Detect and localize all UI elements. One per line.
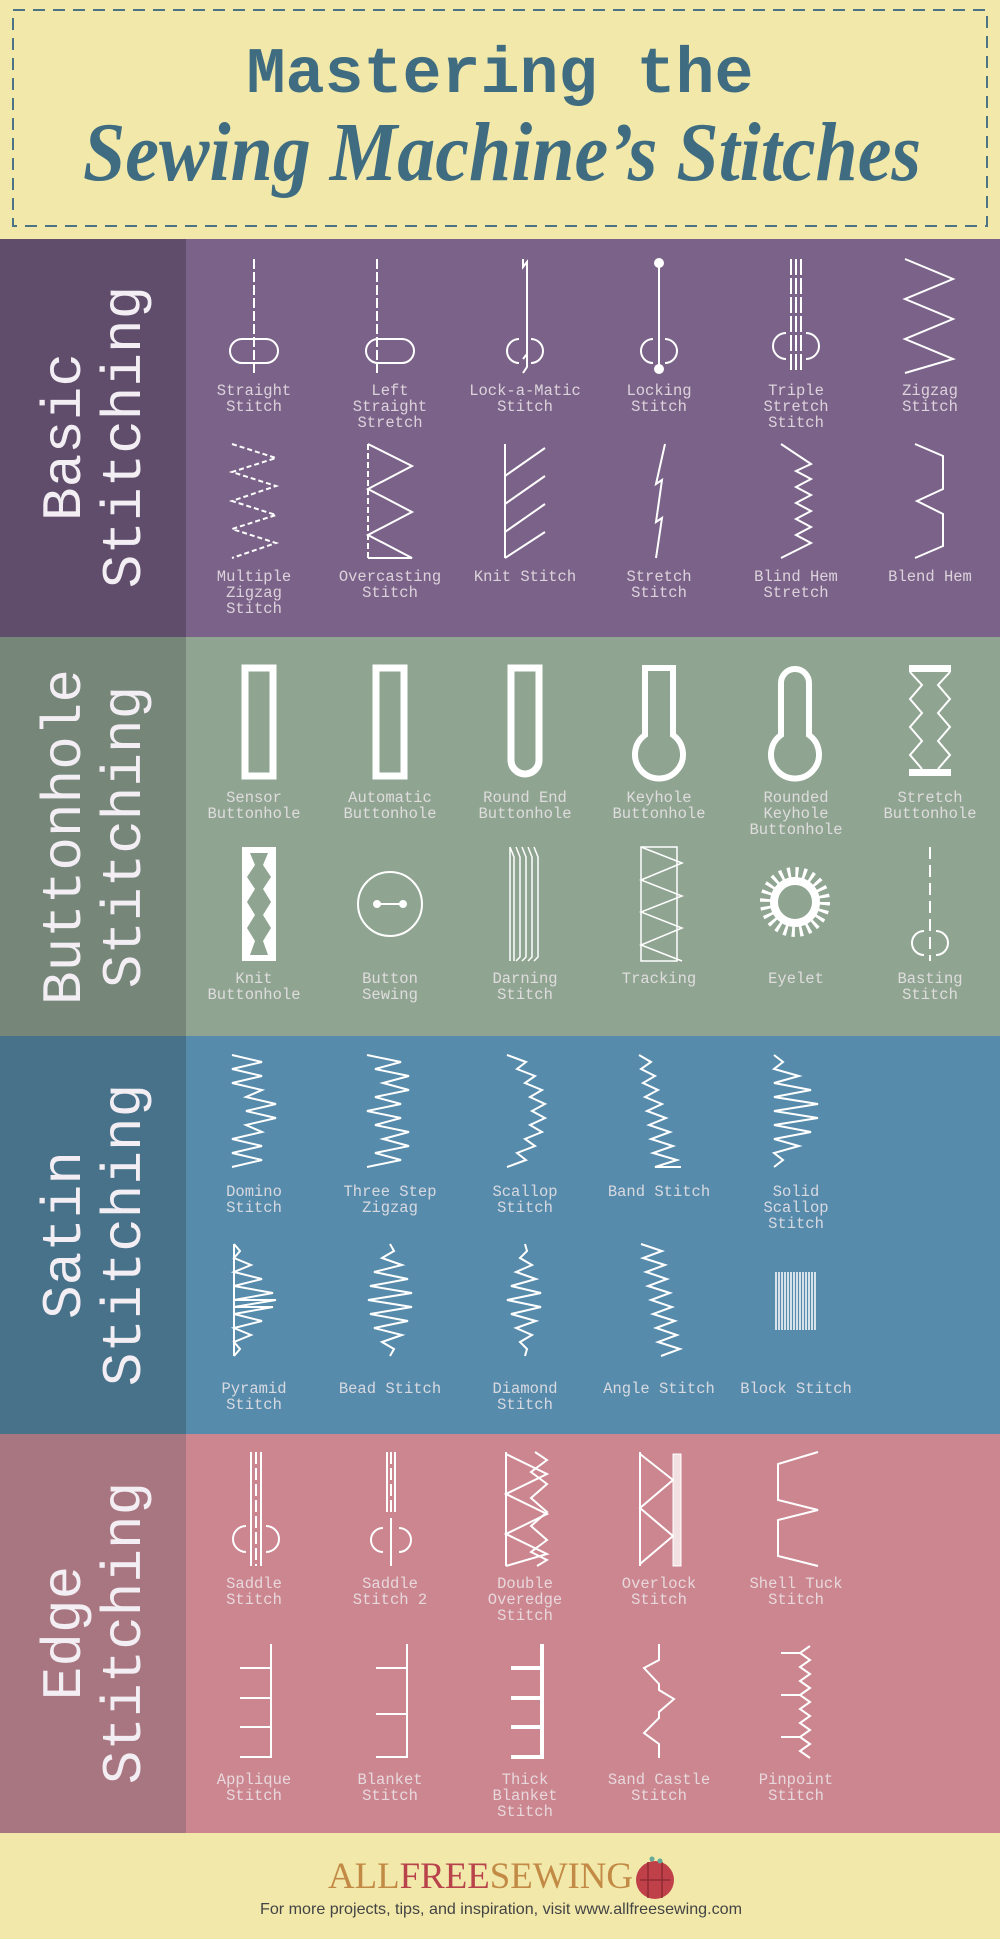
satin labels: Angle Stitch bbox=[603, 1380, 715, 1398]
edge labels: Stitch bbox=[226, 1787, 282, 1805]
icon: pincushion bbox=[636, 1856, 674, 1899]
title banner bbox=[0, 0, 1000, 239]
satin labels: Stitch bbox=[497, 1199, 553, 1217]
basic labels: Left bbox=[371, 382, 409, 400]
buttonhole labels: Buttonhole bbox=[207, 986, 301, 1004]
basic labels: Knit Stitch bbox=[474, 568, 576, 586]
panel: edge stitching: Stitching bbox=[93, 1482, 157, 1784]
satin labels: Scallop bbox=[492, 1183, 558, 1201]
buttonhole labels: Buttonhole bbox=[207, 805, 301, 823]
basic labels: Stretch bbox=[357, 414, 423, 432]
satin labels: Diamond bbox=[492, 1380, 558, 1398]
buttonhole labels: Automatic bbox=[348, 789, 432, 807]
buttonhole labels: Buttonhole bbox=[749, 821, 843, 839]
buttonhole labels: Keyhole bbox=[626, 789, 692, 807]
edge labels: Stitch bbox=[497, 1803, 553, 1821]
logo: ALLFREESEWING bbox=[328, 1856, 633, 1897]
edge labels: Applique bbox=[217, 1771, 291, 1789]
buttonhole labels: Buttonhole bbox=[883, 805, 977, 823]
buttonhole labels: Tracking bbox=[622, 970, 696, 988]
panel: edge stitching: Edge bbox=[33, 1566, 97, 1700]
edge labels: Saddle bbox=[362, 1575, 418, 1593]
edge icons bbox=[233, 1452, 818, 1566]
edge labels: Pinpoint bbox=[759, 1771, 833, 1789]
satin labels: Solid bbox=[773, 1183, 819, 1201]
edge labels: Overedge bbox=[488, 1591, 562, 1609]
basic labels: Straight bbox=[353, 398, 427, 416]
basic labels: Stitch bbox=[226, 600, 282, 618]
panel: satin stitching: Satin bbox=[33, 1151, 97, 1319]
buttonhole labels: Sensor bbox=[226, 789, 282, 807]
basic labels: Stitch bbox=[768, 414, 824, 432]
buttonhole labels: Darning bbox=[492, 970, 558, 988]
edge labels: Stitch bbox=[631, 1591, 687, 1609]
edge labels: Sand Castle bbox=[608, 1771, 710, 1789]
edge labels: Thick bbox=[502, 1771, 548, 1789]
basic labels bbox=[217, 382, 972, 618]
panel: satin stitching: Stitching bbox=[93, 1084, 157, 1386]
buttonhole labels: Rounded bbox=[763, 789, 829, 807]
edge labels: Stitch bbox=[362, 1787, 418, 1805]
basic labels: Stretch bbox=[763, 398, 829, 416]
satin labels: Stitch bbox=[768, 1215, 824, 1233]
basic labels: Lock-a-Matic bbox=[469, 382, 581, 400]
edge labels: Stitch bbox=[631, 1787, 687, 1805]
basic labels: Stitch bbox=[902, 398, 958, 416]
basic labels: Stitch bbox=[631, 584, 687, 602]
panel: buttonhole stitching: Buttonhole bbox=[33, 669, 97, 1005]
edge labels: Stitch bbox=[768, 1787, 824, 1805]
panel: basic stitching: Basic bbox=[33, 353, 97, 521]
basic labels: Stitch bbox=[631, 398, 687, 416]
basic labels: Triple bbox=[768, 382, 824, 400]
panel: buttonhole stitching: Stitching bbox=[93, 686, 157, 988]
buttonhole labels: Stretch bbox=[897, 789, 963, 807]
satin labels bbox=[221, 1183, 852, 1414]
panel: satin stitching bbox=[0, 1036, 1000, 1434]
basic labels: Stitch bbox=[497, 398, 553, 416]
edge labels: Stitch bbox=[497, 1607, 553, 1625]
title banner: Sewing Machine’s Stitches bbox=[83, 106, 921, 199]
edge labels: Double bbox=[497, 1575, 553, 1593]
buttonhole labels: Round End bbox=[483, 789, 567, 807]
buttonhole labels: Buttonhole bbox=[612, 805, 706, 823]
basic labels: Stitch bbox=[362, 584, 418, 602]
satin labels: Stitch bbox=[497, 1396, 553, 1414]
title banner: Mastering the bbox=[246, 38, 754, 112]
footer: For more projects, tips, and inspiration, visit www.allfreesewing.com bbox=[260, 1901, 742, 1918]
edge labels: Blanket bbox=[357, 1771, 423, 1789]
edge labels bbox=[217, 1575, 843, 1821]
basic icons bbox=[230, 259, 953, 373]
edge labels: Stitch bbox=[768, 1591, 824, 1609]
satin labels: Stitch bbox=[226, 1199, 282, 1217]
basic labels: Stretch bbox=[626, 568, 692, 586]
basic labels: Zigzag bbox=[226, 584, 282, 602]
buttonhole labels: Button bbox=[362, 970, 418, 988]
satin labels: Stitch bbox=[226, 1396, 282, 1414]
buttonhole labels: Basting bbox=[897, 970, 963, 988]
panel: buttonhole stitching bbox=[0, 637, 1000, 1036]
edge labels: Stitch bbox=[226, 1591, 282, 1609]
panel: edge stitching bbox=[0, 1434, 1000, 1833]
buttonhole labels: Keyhole bbox=[763, 805, 829, 823]
panel: basic stitching bbox=[0, 239, 1000, 637]
basic labels: Multiple bbox=[217, 568, 291, 586]
satin labels: Pyramid bbox=[221, 1380, 287, 1398]
buttonhole labels: Stitch bbox=[497, 986, 553, 1004]
basic labels: Blind Hem bbox=[754, 568, 838, 586]
edge labels: Overlock bbox=[622, 1575, 696, 1593]
buttonhole labels: Buttonhole bbox=[478, 805, 572, 823]
basic labels: Locking bbox=[626, 382, 692, 400]
edge labels: Blanket bbox=[492, 1787, 558, 1805]
buttonhole labels: Eyelet bbox=[768, 970, 824, 988]
satin labels: Block Stitch bbox=[740, 1380, 852, 1398]
edge labels: Stitch 2 bbox=[353, 1591, 427, 1609]
panel: basic stitching: Stitching bbox=[93, 286, 157, 588]
basic labels: Stitch bbox=[226, 398, 282, 416]
satin labels: Bead Stitch bbox=[339, 1380, 441, 1398]
basic labels: Zigzag bbox=[902, 382, 958, 400]
edge labels: Saddle bbox=[226, 1575, 282, 1593]
satin labels: Zigzag bbox=[362, 1199, 418, 1217]
buttonhole labels bbox=[207, 789, 977, 1004]
satin labels: Scallop bbox=[763, 1199, 829, 1217]
buttonhole labels: Stitch bbox=[902, 986, 958, 1004]
buttonhole icons bbox=[245, 665, 951, 778]
basic labels: Straight bbox=[217, 382, 291, 400]
satin labels: Band Stitch bbox=[608, 1183, 710, 1201]
buttonhole labels: Buttonhole bbox=[343, 805, 437, 823]
basic labels: Overcasting bbox=[339, 568, 441, 586]
buttonhole labels: Knit bbox=[235, 970, 273, 988]
basic labels: Blend Hem bbox=[888, 568, 972, 586]
satin icons bbox=[232, 1055, 818, 1167]
buttonhole labels: Sewing bbox=[362, 986, 418, 1004]
satin labels: Three Step bbox=[343, 1183, 437, 1201]
basic labels: Stretch bbox=[763, 584, 829, 602]
edge labels: Shell Tuck bbox=[749, 1575, 843, 1593]
satin labels: Domino bbox=[226, 1183, 282, 1201]
footer bbox=[0, 1833, 1000, 1939]
